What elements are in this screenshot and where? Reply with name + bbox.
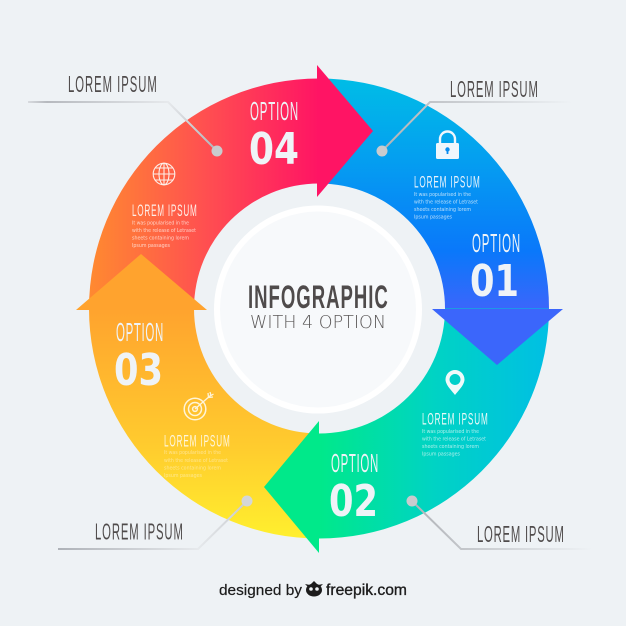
- icon: freepik logo: [305, 581, 323, 596]
- text block: option 3: [164, 431, 230, 479]
- text block: option 4: sheets containing lorem: [132, 236, 189, 242]
- text block: option 4: [132, 201, 197, 249]
- text block: option 2: with the release of Letraset: [422, 436, 486, 442]
- text block: option 3: sheets containing lorem: [164, 466, 221, 472]
- callout: bottom left: LOREM IPSUM: [95, 518, 183, 545]
- segment: option 2 green: [319, 308, 549, 538]
- option 2 label: OPTION: [331, 450, 378, 478]
- text block: option 3: LOREM IPSUM: [164, 431, 230, 450]
- arrow: option 2: [264, 421, 319, 553]
- icon: target: [184, 392, 214, 420]
- icon: map pin: [446, 370, 464, 395]
- text block: option 3: Ipsum passages: [164, 473, 202, 479]
- text block: option 1: It was popularised in the: [414, 192, 471, 198]
- icon: globe: [153, 163, 175, 185]
- callout: bottom left: [58, 496, 252, 549]
- footer credit: designed by: [219, 582, 303, 599]
- text block: option 3: It was popularised in the: [164, 450, 221, 456]
- callout: top left: LOREM IPSUM: [68, 70, 157, 97]
- option 3 label: OPTION: [116, 319, 163, 347]
- arrow: option 3: [76, 254, 207, 310]
- text block: option 3: with the release of Letraset: [164, 458, 228, 464]
- option 4 label: [249, 98, 299, 175]
- option 1 label: OPTION: [472, 230, 520, 258]
- callout: bottom right: LOREM IPSUM: [477, 520, 564, 547]
- option 4 label: OPTION: [250, 98, 298, 126]
- center circle: [217, 208, 419, 410]
- option 2 label: 02: [329, 476, 378, 527]
- arrow: option 4: [317, 65, 373, 197]
- callout: top left: [28, 70, 222, 156]
- center title: [248, 279, 388, 333]
- text block: option 1: Ipsum passages: [414, 214, 452, 220]
- text block: option 2: Ipsum passages: [422, 452, 460, 458]
- text block: option 2: [422, 409, 488, 458]
- callout: top right: LOREM IPSUM: [450, 75, 538, 102]
- ring segments: [89, 78, 549, 538]
- text block: option 4: Ipsum passages: [132, 243, 170, 249]
- segment: option 1 blue: [319, 78, 549, 308]
- text block: option 2: sheets containing lorem: [422, 444, 479, 450]
- footer credit: [219, 581, 407, 599]
- option 3 label: 03: [114, 345, 163, 396]
- callout: top right: [376, 75, 572, 156]
- text block: option 1: [414, 172, 480, 220]
- text block: option 1: with the release of Letraset: [414, 200, 478, 206]
- center subtitle: WITH 4 OPTION: [250, 313, 386, 333]
- center title: INFOGRAPHIC: [248, 279, 388, 315]
- callout: bottom right: [406, 496, 592, 549]
- segment: option 3 yellow: [89, 308, 319, 538]
- icon: padlock: [436, 132, 459, 159]
- text block: option 2: LOREM IPSUM: [422, 409, 488, 428]
- text block: option 4: LOREM IPSUM: [132, 201, 197, 220]
- option 4 label: 04: [249, 124, 299, 175]
- footer credit: freepik.com: [326, 582, 407, 599]
- option 3 label: [114, 319, 163, 396]
- text block: option 4: It was popularised in the: [132, 220, 189, 226]
- text block: option 2: It was popularised in the: [422, 429, 479, 435]
- option 2 label: [329, 450, 378, 527]
- text block: option 1: LOREM IPSUM: [414, 172, 480, 191]
- text block: option 1: sheets containing lorem: [414, 207, 471, 213]
- option 1 label: 01: [470, 256, 519, 307]
- arrow: option 1: [432, 309, 563, 365]
- segment: option 4 red: [89, 78, 319, 308]
- option 1 label: [470, 230, 520, 307]
- text block: option 4: with the release of Letraset: [132, 228, 196, 234]
